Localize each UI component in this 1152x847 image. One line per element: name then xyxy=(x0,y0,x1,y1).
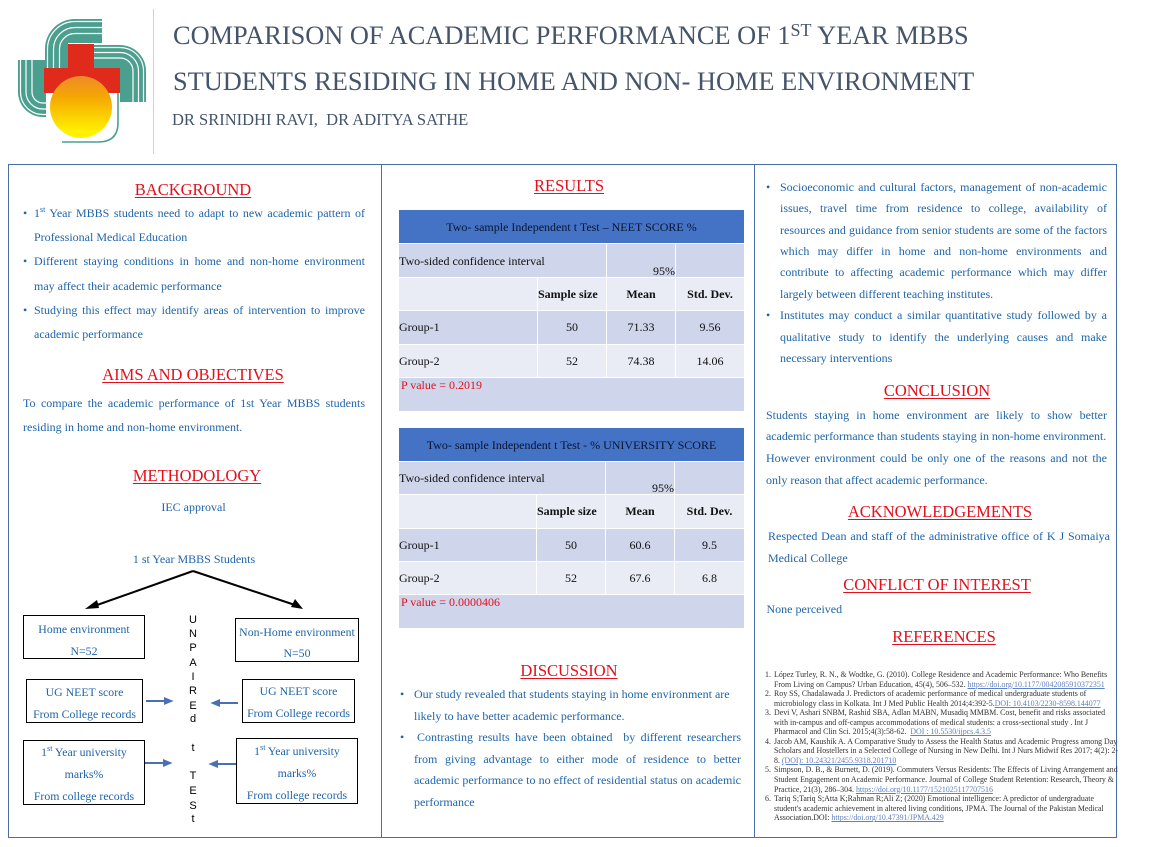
title xyxy=(173,20,974,96)
text: discussion continued bullets xyxy=(766,180,1107,365)
table: NEET score: 52 xyxy=(566,354,578,368)
text: unpaired t test vertical: U xyxy=(189,614,197,626)
text: background bullets: 1st Year MBBS students need to adapt to new academic pattern of xyxy=(34,205,365,220)
text: discussion continued bullets: which may differ in home and non-home environments and xyxy=(780,244,1107,258)
text: background bullets: Studying this effect may identify areas of intervention to improve xyxy=(34,303,365,317)
text: unpaired t test vertical: E xyxy=(189,785,197,797)
text: conclusion: Students staying in home environment are likely to show better xyxy=(766,408,1107,422)
text: discussion bullets: from giving advantage to either mode of residence to better xyxy=(414,752,741,766)
box: university marks left: marks% xyxy=(65,767,103,781)
authors: DR SRINIDHI RAVI, DR ADITYA SATHE xyxy=(172,110,468,129)
text: references: López Turley, R. N., & Wodtke, G. (2010). College Residence and Academic Performance: Who Benefits xyxy=(774,670,1107,679)
heading: aims and objectives: AIMS AND OBJECTIVES xyxy=(102,365,284,384)
text: references: Devi V, Ashari SNBM, Rashid SBA, Adlan MABN, Musadiq MMBM. Cost, benefit and risks associated xyxy=(774,708,1105,717)
panel: left column: • xyxy=(23,254,27,268)
heading: conclusion: CONCLUSION xyxy=(884,381,990,400)
text: unpaired t test vertical: R xyxy=(189,685,197,697)
text: references: Pharmacol and Clin Sci. 2015;4(3):58-62. DOI : 10.5530/ijpcs.4.3.5 xyxy=(774,727,991,736)
heading: results: RESULTS xyxy=(534,176,604,195)
text: discussion continued bullets: largely between different teaching institutes. xyxy=(780,287,993,301)
text: unpaired t test vertical: P xyxy=(189,642,197,654)
text: references: Practice, 21(3), 286–304. https://doi.org/10.1177/1521025117707516 xyxy=(774,785,993,794)
table: NEET score xyxy=(399,210,744,411)
box: non-home environment: Non-Home environment xyxy=(239,625,355,639)
table: university score: 67.6 xyxy=(630,571,650,585)
text: IEC approval: IEC approval xyxy=(161,500,226,514)
text: unpaired t test vertical: t xyxy=(191,742,195,754)
title: STUDENTS RESIDING IN HOME AND NON- HOME ENVIRONMENT xyxy=(173,67,974,96)
table: NEET score: Sample size xyxy=(538,287,598,301)
table: NEET score: P value = 0.2019 xyxy=(401,378,482,392)
box: UG NEET left xyxy=(26,679,143,723)
text: references: From Living on Campus? Urban Education, 45(4), 506–532. https://doi.org/10.1177/0042085910372351 xyxy=(774,680,1105,689)
box: university marks left: From college records xyxy=(34,789,134,803)
text: discussion continued bullets: contribute to affecting academic performance which may differ xyxy=(780,265,1107,279)
box: UG NEET right xyxy=(242,679,355,723)
text: aims: residing in home and non-home environment. xyxy=(23,420,242,434)
text: flowchart root: 1 st Year MBBS Students xyxy=(133,552,255,566)
text: references: with in-campus and off-campus accommodations of medical students: a cross-sectional study . Int J xyxy=(774,718,1088,727)
header xyxy=(18,9,974,154)
panel: left column: • xyxy=(23,206,27,220)
title: COMPARISON OF ACADEMIC PERFORMANCE OF 1ST YEAR MBBS xyxy=(173,20,969,50)
text: background bullets xyxy=(23,205,365,341)
text: discussion bullets: Our study revealed that students staying in home environment are xyxy=(414,687,730,701)
text: discussion continued bullets: Socioeconomic and cultural factors, management of non-academic xyxy=(780,180,1107,194)
box: home environment xyxy=(23,615,145,659)
text: acknowledgements: Medical College xyxy=(768,551,848,565)
table: university score: 95% xyxy=(652,481,674,495)
text: aims: To compare the academic performance of 1st Year MBBS students xyxy=(23,396,365,410)
text: conclusion: academic performance than students staying in non-home environment. xyxy=(766,429,1106,443)
table: NEET score: Group-2 xyxy=(399,354,440,368)
table: university score: Group-1 xyxy=(399,538,440,552)
text: aims xyxy=(23,396,365,434)
table: NEET score: Two- sample Independent t Test – NEET SCORE % xyxy=(446,220,697,234)
table: university score: P value = 0.0000406 xyxy=(401,595,500,609)
text: discussion continued bullets: qualitative study to identify the underlying causes and make xyxy=(780,330,1107,344)
text: discussion bullets xyxy=(400,687,741,808)
text: references: Scholars and Hostellers in a Selected College of Nursing in New Delhi. Int J Nurs Midwif Res 2017; 4(2): 2- xyxy=(774,746,1118,755)
box: university marks right: marks% xyxy=(278,766,316,780)
text: unpaired t test vertical: A xyxy=(189,657,197,669)
text: references xyxy=(765,670,1118,822)
table: university score: 52 xyxy=(565,571,577,585)
text: acknowledgements xyxy=(768,529,1110,565)
text: references: 1. xyxy=(765,670,771,679)
heading: acknowledgements: ACKNOWLEDGEMENTS xyxy=(848,502,1032,521)
heading: discussion: DISCUSSION xyxy=(520,661,618,680)
panel: right column: • xyxy=(766,308,770,322)
text: references: Tariq S;Tariq S;Atta K;Rahman R;Ali Z; (2020) Emotional intelligence: A predictor of undergraduate xyxy=(774,794,1094,803)
text: references: 6. xyxy=(765,794,771,803)
text: background bullets: may affect their academic performance xyxy=(34,279,222,293)
table: NEET score: 50 xyxy=(566,320,578,334)
text: references: 5. xyxy=(765,765,771,774)
text: unpaired t test vertical: S xyxy=(189,800,197,812)
text: references: student's academic achievement in altered living conditions, JPMA. The Journal of the Pakistan Medical xyxy=(774,804,1104,813)
text: discussion continued bullets: resources and guidance from senior students are some of the factors xyxy=(780,222,1107,236)
table: university score: Mean xyxy=(625,504,655,518)
text: discussion bullets: performance xyxy=(414,794,475,808)
box: UG NEET left: UG NEET score xyxy=(46,685,123,699)
text: references: 2. xyxy=(765,689,771,698)
table: NEET score: 95% xyxy=(653,264,675,278)
panel: middle column: • xyxy=(400,730,404,744)
text: discussion continued bullets: Institutes may conduct a similar quantitative study followed by a xyxy=(780,308,1107,322)
box: university marks left xyxy=(23,740,145,805)
table: NEET score: 71.33 xyxy=(628,320,654,334)
text: references: Roy SS, Chadalawada J. Predictors of academic performance of medical undergraduate students of xyxy=(774,689,1086,698)
panel: middle column: • xyxy=(400,687,404,701)
table: university score: Std. Dev. xyxy=(687,504,732,518)
box: non-home environment xyxy=(235,618,359,662)
box: non-home environment: N=50 xyxy=(284,646,310,660)
heading: conflict of interest: CONFLICT OF INTEREST xyxy=(843,575,1031,594)
heading: background: BACKGROUND xyxy=(135,180,251,199)
box: UG NEET left: From College records xyxy=(33,707,136,721)
box: UG NEET right: From College records xyxy=(247,706,350,720)
heading: methodology: METHODOLOGY xyxy=(133,466,261,485)
text: unpaired t test vertical: E xyxy=(189,700,197,712)
icon: institution logo xyxy=(18,19,146,143)
table: university score: 9.5 xyxy=(702,538,717,552)
text: conflict of interest: None perceived xyxy=(766,602,842,616)
text: references: 3. xyxy=(765,708,771,717)
table: NEET score: Mean xyxy=(626,287,656,301)
box: home environment: Home environment xyxy=(38,622,130,636)
text: unpaired t test vertical: T xyxy=(190,770,196,782)
table: NEET score: 9.56 xyxy=(700,320,720,334)
table: NEET score: Two-sided confidence interval xyxy=(399,254,545,268)
text: discussion bullets: academic performance to no effect of residential status on academic xyxy=(414,773,741,787)
text: discussion continued bullets: issues, travel time from residence to college, availability of xyxy=(780,201,1107,215)
text: conclusion: However environment could be only one of the reasons and not the xyxy=(766,451,1107,465)
box: university marks right xyxy=(236,738,358,804)
text: references: 8. (DOI): 10.24321/2455.9318.201710 xyxy=(774,756,896,765)
text: conclusion: only reason that affect academic performance. xyxy=(766,473,988,487)
panel: left column: • xyxy=(23,303,27,317)
text: acknowledgements: Respected Dean and staff of the administrative office of K J Somaiya xyxy=(768,529,1110,543)
text: unpaired t test vertical: N xyxy=(189,628,197,640)
text: discussion bullets: Contrasting results have been obtained by different researchers xyxy=(417,730,741,744)
table: university score: Group-2 xyxy=(399,571,440,585)
panel: right column xyxy=(755,164,1117,838)
text: unpaired t test vertical: t xyxy=(191,813,195,825)
table: university score: Two-sided confidence interval xyxy=(399,471,545,485)
text: references: Simpson, D. B., & Burnett, D. (2019). Commuters Versus Residents: The Effects of Living Arrangement and xyxy=(774,765,1118,774)
box: university marks right: From college records xyxy=(247,788,347,802)
flowchart xyxy=(23,552,359,825)
text: unpaired t test vertical: d xyxy=(190,713,196,725)
panel: right column: • xyxy=(766,180,770,194)
table: university score: Two- sample Independent t Test - % UNIVERSITY SCORE xyxy=(427,438,716,452)
table: university score: 60.6 xyxy=(630,538,650,552)
table: NEET score: 74.38 xyxy=(628,354,654,368)
text: unpaired t test vertical: I xyxy=(191,671,195,683)
text: background bullets: Professional Medical Education xyxy=(34,230,187,244)
box: university marks left: 1st Year university xyxy=(41,744,127,759)
text: discussion bullets: likely to have better academic performance. xyxy=(414,708,625,722)
table: university score: 50 xyxy=(565,538,577,552)
table: NEET score: Group-1 xyxy=(399,320,440,334)
text: references: Jacob AM, Kaushik A. A Comparative Study to Assess the Health Status and Academic Progress among Day xyxy=(774,737,1117,746)
table: university score xyxy=(399,428,744,628)
box: university marks right: 1st Year university xyxy=(254,743,340,758)
box: UG NEET right: UG NEET score xyxy=(260,684,337,698)
text: references: microbiology class in Kolkata. Int J Med Public Health 2014;4:392-5.DOI: 10.4103/2230-8598.144077 xyxy=(774,699,1101,708)
text: references: 4. xyxy=(765,737,771,746)
text: references: Association.DOI: https://doi.org/10.47391/JPMA.429 xyxy=(774,813,944,822)
table: NEET score: 14.06 xyxy=(696,354,724,368)
table: university score: 6.8 xyxy=(702,571,717,585)
text: unpaired t test vertical xyxy=(189,614,197,825)
arrows: root to groups xyxy=(85,570,303,768)
panel: left column xyxy=(8,164,382,838)
text: background bullets: academic performance xyxy=(34,327,143,341)
box: home environment: N=52 xyxy=(70,644,97,658)
text: conclusion xyxy=(766,408,1107,487)
panel: middle column xyxy=(381,164,755,838)
text: background bullets: Different staying conditions in home and non-home environment xyxy=(34,254,365,268)
text: discussion continued bullets: necessary interventions xyxy=(780,351,892,365)
table: NEET score: Std. Dev. xyxy=(687,287,733,301)
heading: references: REFERENCES xyxy=(892,627,996,646)
table: university score: Sample size xyxy=(537,504,597,518)
text: references: Student Engagement on Academic Performance. Journal of College Student Retention: Research, Theory & xyxy=(774,775,1114,784)
